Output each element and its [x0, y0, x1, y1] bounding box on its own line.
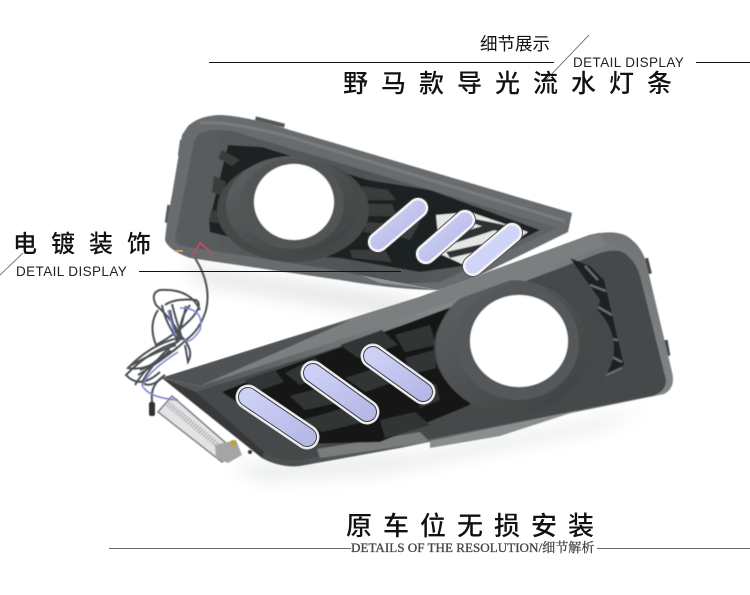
- front bracket: outer frame: [162, 232, 673, 466]
- back LED bars: [378, 208, 512, 266]
- top rule left: [209, 62, 554, 63]
- soft floor shadows: [180, 262, 650, 482]
- bottom title: 原车位无损安装: [346, 511, 605, 541]
- front bracket: grille cells: [245, 325, 440, 438]
- top rule right: [696, 62, 750, 63]
- title: 野马款导光流水灯条: [343, 70, 685, 98]
- bottom rule right: [597, 548, 750, 549]
- back bracket: mounting clips: [165, 116, 411, 223]
- top diagonal line: [546, 35, 589, 80]
- back bracket: [165, 115, 572, 290]
- back bracket: top rim highlight: [200, 123, 565, 221]
- back bracket: chrome behind LED: [436, 212, 528, 264]
- back bracket: orange mark: [175, 250, 183, 252]
- back bracket: fog lamp hole: [254, 164, 334, 240]
- front bracket: [162, 232, 673, 466]
- LED bar back 3: [473, 233, 512, 266]
- LED bar front 3: [373, 356, 423, 392]
- front bracket: rim dark left: [162, 320, 350, 386]
- front bracket: right grille: [570, 258, 624, 382]
- front bracket: left darker corner: [162, 378, 264, 458]
- bottom rule left: [109, 548, 351, 549]
- LED bar back 2: [426, 220, 465, 254]
- left heading: 电镀装饰: [13, 231, 165, 258]
- left caption english: DETAIL DISPLAY: [16, 264, 127, 279]
- back bracket: fog lamp ring: [217, 158, 369, 262]
- front bracket: fog lamp ring: [434, 282, 614, 414]
- LED bar front 1: [248, 397, 307, 437]
- blue wires: [142, 308, 201, 400]
- main wires: [126, 258, 208, 414]
- daytime module under front bracket: [158, 396, 252, 463]
- LED bar front 2: [313, 373, 367, 412]
- front bracket: inner face: [196, 251, 666, 460]
- left rule: [139, 271, 401, 272]
- top caption english: DETAIL DISPLAY: [573, 55, 684, 70]
- front bracket: fog lamp hole: [470, 295, 568, 387]
- bottom caption: DETAILS OF THE RESOLUTION/细节解析: [351, 540, 594, 555]
- wire connector: [149, 402, 155, 416]
- front bracket: light lower edge patch: [317, 432, 430, 458]
- wire harness: [126, 258, 208, 416]
- back bracket: lower highlight: [360, 275, 440, 290]
- front bracket: side clips: [644, 258, 652, 274]
- LED bar back 1: [378, 208, 418, 242]
- front LED bars: [248, 356, 423, 437]
- back bracket: grille cells: [209, 150, 420, 262]
- back bracket: grille: [209, 145, 540, 272]
- front bracket: main grille: [222, 300, 470, 444]
- back bracket: red wire mark: [193, 243, 212, 255]
- back bracket: inner face: [175, 130, 558, 284]
- top caption chinese: 细节展示: [480, 34, 550, 54]
- front bracket: top rim: [162, 233, 605, 386]
- back bracket: outer frame: [165, 115, 572, 290]
- left diagonal line: [0, 253, 23, 275]
